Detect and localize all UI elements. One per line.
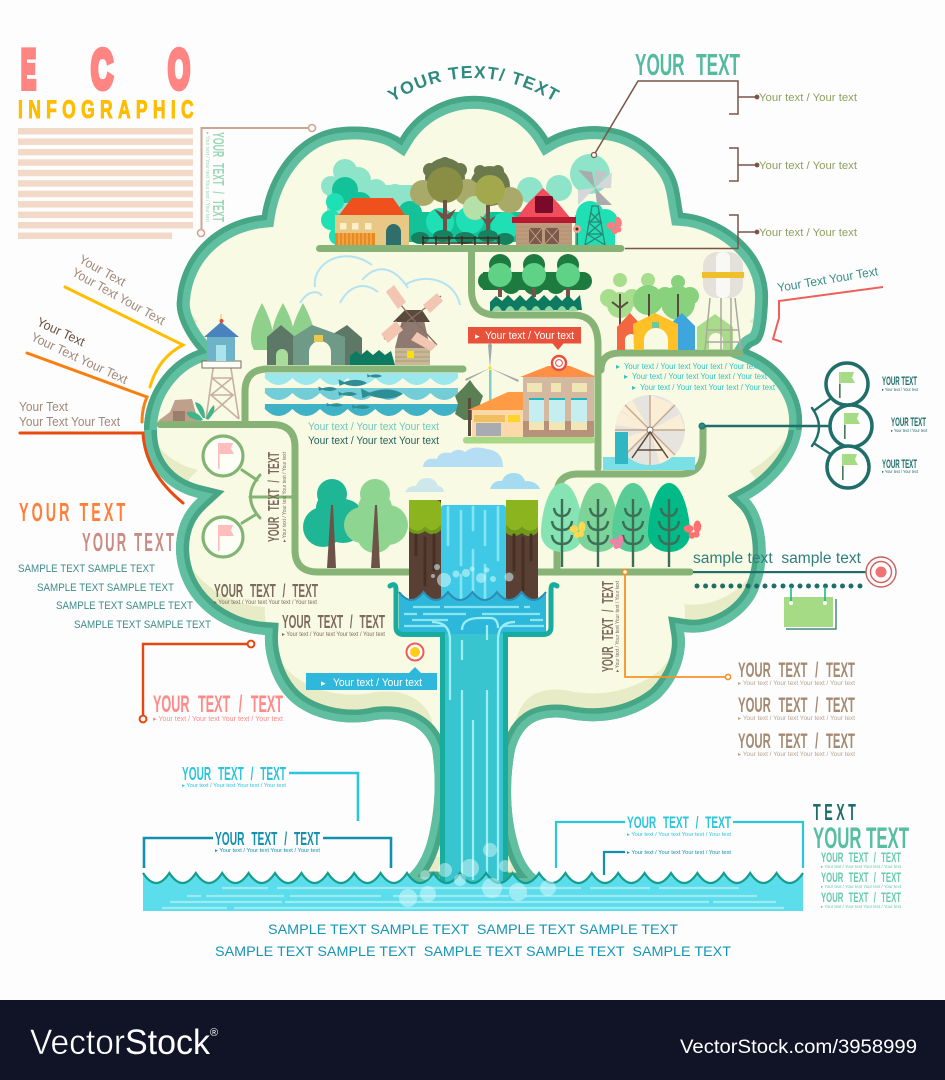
red label: Your text / Your text (485, 330, 574, 342)
hedge (350, 350, 395, 365)
bottom sample text (215, 921, 731, 959)
callout yellow (65, 252, 183, 387)
water tower (702, 252, 744, 350)
flag circles right (699, 363, 872, 488)
upper right callout (556, 813, 803, 868)
left text block: SAMPLE TEXT SAMPLE TEXT (37, 582, 174, 594)
red barn (512, 188, 576, 245)
caption 1: YOUR TEXT / TEXT (214, 581, 318, 601)
left text block: SAMPLE TEXT SAMPLE TEXT (74, 619, 211, 631)
left text block: SAMPLE TEXT SAMPLE TEXT (18, 563, 155, 575)
shelf caption: ▸ (632, 383, 636, 392)
shelf caption (616, 361, 776, 392)
town buildings (455, 327, 597, 444)
icon: flag (839, 372, 855, 398)
angled callout right (773, 264, 883, 342)
left angled callouts (19, 252, 183, 503)
wind pump (578, 170, 612, 245)
caption 1: ▸ Your text / Your text Your text / Your text (214, 600, 317, 606)
label group 3: ▸ Your text / Your text Your text / Your text (738, 752, 855, 758)
rocks and plant (158, 399, 214, 421)
lower left callout: ▸ Your text / Your text Your text / Your text (215, 848, 320, 854)
waterfall (409, 500, 538, 603)
footer watermark band: VectorStock.com/3958999 (680, 1037, 917, 1058)
red bracket callout: ▸ Your text / Your text Your text / Your text (153, 716, 283, 723)
top-right heading and brackets: YOUR TEXT (635, 47, 740, 82)
upper left callout: ▸ Your text / Your text Your text / Your text (182, 783, 286, 789)
small house (468, 392, 524, 437)
vertical caption (600, 581, 621, 672)
vertical callout with bracket: YOUR TEXT / TEXT (209, 132, 226, 222)
right labels for flags: ▸ Your text / Your text (891, 428, 928, 433)
sample text timeline: sample text sample text (693, 550, 862, 567)
label 2: Your text / Your text (759, 160, 857, 172)
shelf caption: Your text / Your text Your text / Your text (624, 361, 760, 371)
callout red: Your Text Your Text (19, 415, 120, 429)
water wheel (603, 395, 695, 470)
lower left callout (144, 829, 391, 868)
birdhouse (573, 225, 581, 245)
basin and trunk water column (390, 585, 557, 885)
bubbles (431, 564, 514, 587)
round trees (303, 479, 408, 568)
vertical caption: YOUR TEXT / TEXT (600, 581, 617, 672)
icon: butterfly (605, 216, 624, 235)
pine (455, 380, 483, 436)
label group 1: ▸ Your text / Your text Your text / Your text (738, 681, 855, 687)
flag circles left (203, 436, 293, 557)
blue label (306, 667, 437, 690)
hedge (490, 295, 582, 311)
left text block: SAMPLE TEXT SAMPLE TEXT (56, 600, 193, 612)
callout orange: Your Text Your Text (29, 329, 131, 387)
dotted line (694, 584, 862, 588)
callout red (19, 400, 183, 503)
vertical callout with bracket: ▸ Your text / Your text Your text / Your text (204, 132, 210, 222)
red label (468, 327, 581, 350)
title: ECO INFOGRAPHIC (18, 38, 194, 124)
cascade (441, 505, 506, 603)
pine trees (251, 303, 315, 350)
upper left callout: YOUR TEXT / TEXT (182, 764, 286, 784)
clouds (405, 448, 540, 492)
upper left callout (182, 764, 358, 821)
icon: flag (218, 443, 234, 469)
upper right callout: ▸ Your text / Your text Your text / Your text (627, 832, 731, 838)
vertical caption left: ▸ Your text / Your text Your text / Your text (282, 452, 288, 542)
callout red: Your Text (19, 400, 68, 414)
far right text block (813, 799, 909, 909)
left text block: YOUR TEXT (19, 499, 125, 527)
far right text block: TEXT (813, 799, 856, 825)
splash bubbles (399, 843, 556, 907)
right labels for flags: ▸ Your text / Your text (882, 469, 919, 474)
lower right callout: ▸ Your text / Your text Your text / Your text (627, 850, 731, 856)
shelf caption: Your text / Your text Your text / Your text (632, 371, 768, 381)
blue label: Your text / Your text (333, 677, 422, 689)
caption 2: ▸ Your text / Your text Your text / Your text (282, 632, 385, 638)
upper right callout: YOUR TEXT / TEXT (627, 813, 731, 832)
right labels for flags (882, 374, 928, 474)
lookout tower (158, 314, 241, 421)
footer watermark band: ® (210, 1027, 218, 1039)
background foliage (321, 154, 618, 245)
icon: yellow butterfly (570, 522, 586, 538)
windmill and lake scene (251, 256, 460, 447)
letter O: O (168, 38, 190, 100)
label group 3 (738, 730, 855, 758)
orchard trees (478, 254, 592, 311)
cloud outlines (300, 256, 460, 305)
olive trees (410, 157, 523, 240)
top-right heading and brackets (592, 47, 857, 248)
vertical caption left (266, 452, 288, 542)
far right text block: ▸ Your text / Your text Your text / Your text (821, 884, 902, 889)
lower left callout: YOUR TEXT / TEXT (215, 829, 320, 849)
right labels for flags: ▸ Your text / Your text (882, 387, 919, 392)
icon: flag (842, 454, 858, 480)
bottom sample text: SAMPLE TEXT SAMPLE TEXT SAMPLE TEXT SAMPLE TEXT (268, 921, 678, 937)
green trees (600, 273, 655, 318)
angled callout right: Your Text Your Text (776, 264, 880, 295)
shelf caption: ▸ (624, 372, 628, 381)
village with water tower (600, 252, 744, 350)
icon: flag (218, 525, 234, 551)
vertical caption left: YOUR TEXT / TEXT (266, 452, 283, 542)
footer watermark band (0, 1000, 945, 1080)
bottom brackets and captions (144, 764, 803, 875)
farm houses (267, 325, 362, 365)
icon: red butterfly (684, 521, 701, 539)
hanging note (784, 587, 836, 629)
subtitle: INFOGRAPHIC (18, 95, 194, 124)
far right text block: ▸ Your text / Your text Your text / Your text (821, 864, 902, 869)
target pin on roof (552, 356, 566, 370)
label group 1 (738, 659, 855, 687)
red label: ▸ (475, 331, 480, 341)
orange callout with right labels (622, 569, 855, 758)
shelf caption: ▸ (616, 362, 620, 371)
far right text block: ▸ Your text / Your text Your text / Your text (821, 904, 902, 909)
farm scene (321, 154, 624, 245)
lake caption (308, 421, 439, 447)
callout yellow: Your Text (77, 252, 129, 290)
callout orange: Your Text (35, 314, 88, 349)
windmill (381, 285, 443, 365)
icon: pink butterfly (610, 535, 623, 549)
bottom sample text: SAMPLE TEXT SAMPLE TEXT SAMPLE TEXT SAMPLE TEXT SAMPLE TEXT (215, 943, 731, 959)
icon: flag (844, 413, 860, 439)
coloured houses (617, 313, 733, 350)
callout yellow: Your Text Your Text (70, 265, 168, 328)
label 3: Your text / Your text (759, 227, 857, 239)
fence and plants (411, 230, 514, 245)
sea (143, 843, 803, 911)
label 1: Your text / Your text (759, 92, 857, 104)
inner captions (214, 581, 621, 690)
branch paths (160, 248, 740, 572)
left cliff (409, 500, 441, 600)
letter C: C (91, 38, 113, 100)
shelf caption: Your text / Your text Your text / Your text (640, 382, 776, 392)
caption 2: YOUR TEXT / TEXT (282, 612, 385, 632)
sample text timeline (693, 550, 896, 629)
lake caption: Your text / Your text Your text (308, 435, 439, 447)
caption 1 (214, 581, 318, 606)
callout orange (27, 314, 147, 422)
vertical caption: ▸ Your text / Your text Your text / Your text (615, 581, 621, 672)
curved heading: YOUR TEXT/ TEXT (386, 66, 560, 100)
label group 2: ▸ Your text / Your text Your text / Your text (738, 716, 855, 722)
icon: target (866, 557, 896, 587)
left text block (18, 499, 211, 631)
lower right callout (604, 850, 731, 875)
left text block: YOUR TEXT (82, 528, 174, 557)
lake caption: Your text / Your text Your text (308, 421, 439, 433)
lake (265, 373, 458, 416)
main building (520, 366, 597, 437)
text placeholder bars (18, 128, 193, 239)
right cliff (506, 500, 538, 600)
turbine (465, 343, 519, 412)
target pin (406, 644, 424, 660)
red bracket callout: YOUR TEXT / TEXT (153, 691, 283, 718)
footer watermark band: Vector (30, 1023, 125, 1062)
tree crown and trunk (144, 96, 802, 882)
red bracket callout (140, 641, 283, 723)
vertical callout with bracket (198, 124, 316, 236)
house with orange roof (335, 198, 409, 245)
label group 2 (738, 694, 855, 722)
egg-shaped trees (541, 483, 701, 567)
caption 2 (282, 612, 385, 638)
footer watermark band: Stock (125, 1023, 210, 1062)
title: ECO INFOGRAPHIC: E (21, 38, 36, 100)
blue label: ▸ (321, 678, 326, 688)
